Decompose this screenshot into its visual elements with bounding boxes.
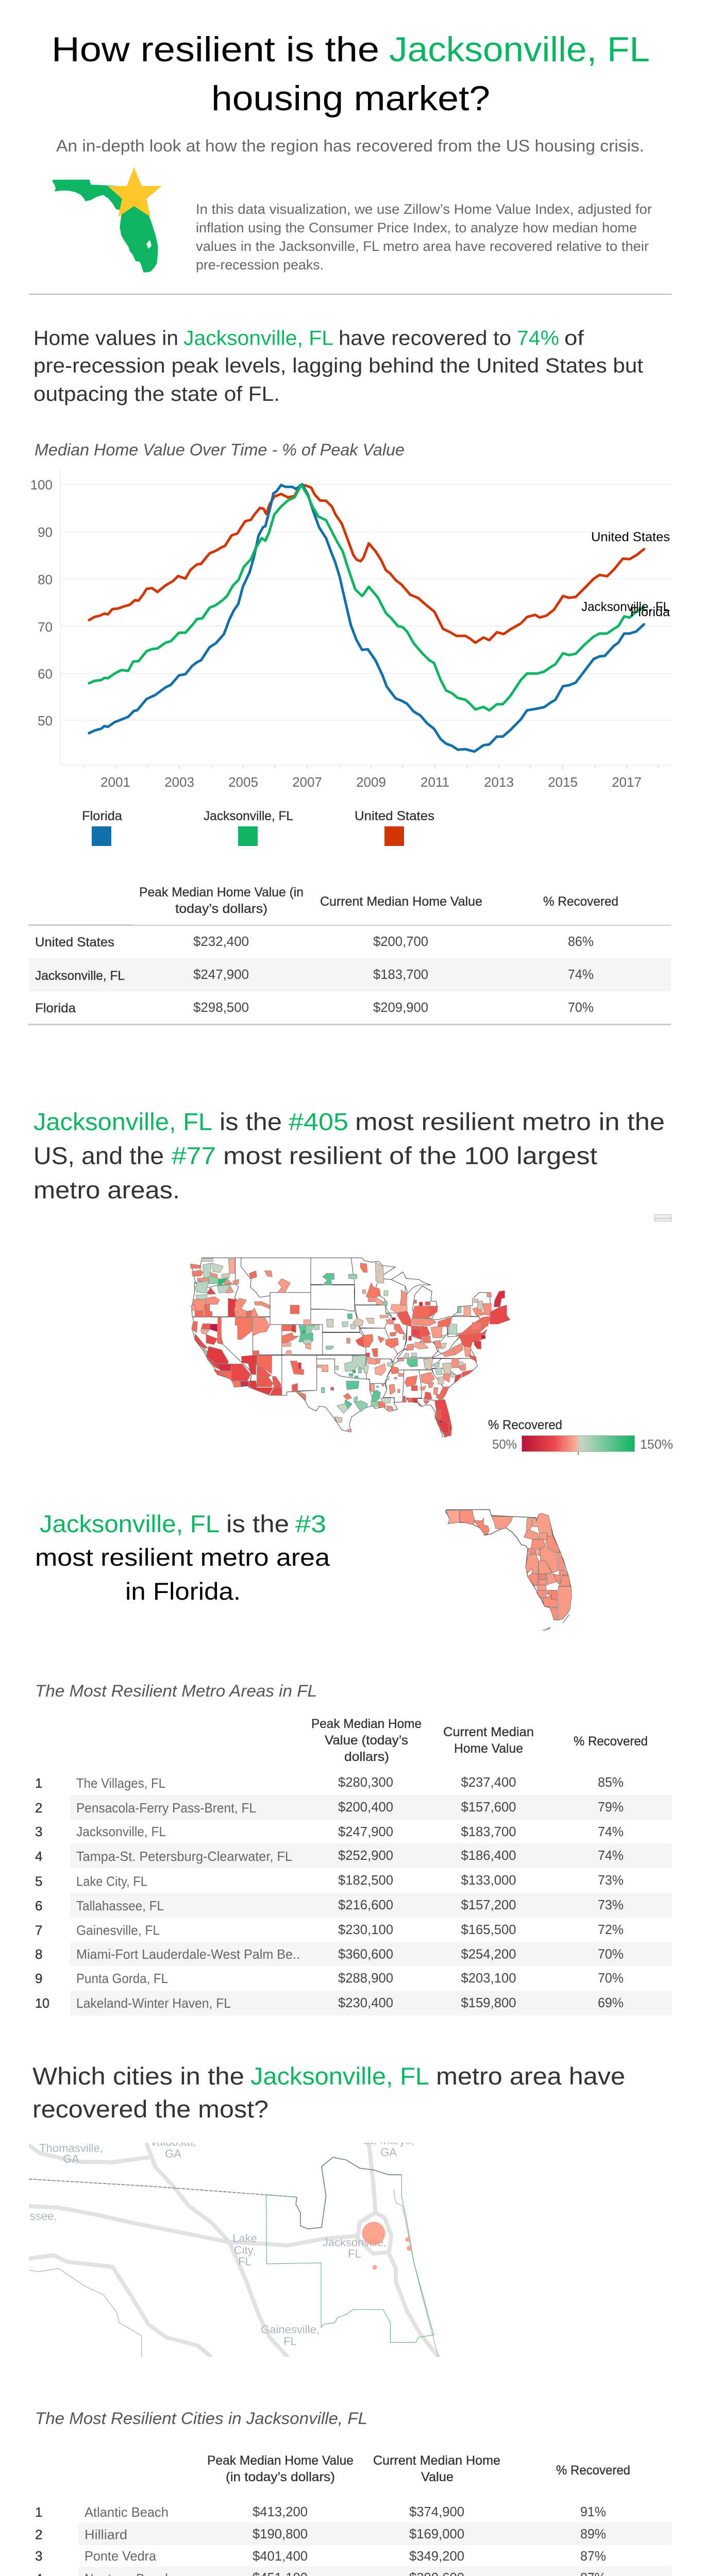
table header [311,1717,648,1764]
table rows: Jacksonville, FL [76,1824,166,1839]
row: United States: United States [35,935,114,950]
city name labels: Valdosta, [150,2136,196,2148]
table rows: 2 [35,2527,42,2542]
series end labels: United States [591,530,670,544]
heading: home value recovery: pre-recession peak levels, lagging behind the United States but [33,354,643,377]
table rows: $247,900 [338,1824,393,1839]
subtitle: An in-depth look at how the region has recovered from the US housing crisis. [56,137,644,155]
table rows: $169,000 [409,2526,464,2541]
city name labels: City, [234,2244,256,2257]
heading: cities in the metro: Which cities in the [32,2062,244,2090]
heading: cities in the metro [32,2062,625,2123]
table rows: $203,100 [461,1970,516,1986]
table header: Peak Median Home Value [207,2453,354,2468]
table rows [35,1774,624,2011]
city name labels: GA [165,2147,181,2160]
heading: cities in the metro: recovered the most? [32,2095,268,2123]
series end labels: Jacksonville, FL [581,600,670,614]
icon: Florida with star [53,167,162,273]
heading: Florida rank: is the [226,1510,289,1537]
heading: Florida rank [35,1510,330,1605]
table rows: 1 [35,2504,42,2520]
table rows: The Villages, FL [76,1775,165,1791]
row: Jacksonville [35,967,594,983]
heading: cities in the metro: Jacksonville, FL [250,2062,429,2090]
table rows: 74% [598,1848,624,1863]
title: How resilient is the [52,30,379,69]
table rows: 79% [598,1799,624,1815]
heading: Florida rank: #3 [295,1510,326,1537]
table rows: $252,900 [338,1848,393,1863]
series end labels [581,530,670,619]
heading: national rank: #77 [172,1142,216,1170]
table header: dollars) [344,1750,389,1764]
heading: national rank: metro areas. [33,1176,180,1204]
table header: (in today’s dollars) [226,2470,335,2484]
table rows: $360,600 [338,1946,393,1962]
y axis labels: 90 [38,524,53,540]
row: United States [35,934,594,950]
table header: % Recovered [556,2463,630,2478]
y axis labels: 50 [38,713,53,728]
map: cities in the Jacksonville metro [29,2134,439,2357]
city name labels: FL [238,2255,251,2268]
roads and boundaries [29,2143,439,2357]
heading: national rank: Jacksonville, FL [33,1108,212,1136]
intro paragraph: In this data visualization, we use Zillow’s Home Value Index, adjusted for [196,201,652,217]
chart legend: Jacksonville, FL [204,809,293,823]
city name labels: Lake [232,2232,257,2245]
heading: home value recovery: have recovered to [339,327,511,349]
row: Jacksonville: $247,900 [193,967,249,982]
title: housing market? [211,79,490,118]
table rows: 3 [35,1824,42,1839]
table rows: $413,200 [253,2504,308,2519]
heading: home value recovery: outpacing the state of FL. [33,383,280,405]
west metro patches [190,1259,342,1422]
heading: national rank: US, and the [33,1142,164,1170]
table rows: $374,900 [409,2504,464,2519]
table rows: Ponte Vedra [85,2548,157,2564]
row: Jacksonville: Jacksonville, FL [35,969,125,983]
table rows: Atlantic Beach [85,2504,169,2520]
table rows: 4 [35,1849,42,1864]
heading: Florida rank: Jacksonville, FL [40,1510,220,1537]
x axis labels: 2003 [164,774,194,790]
chart legend: United States [355,809,434,823]
intro paragraph: inflation using the Consumer Price Index, to analyze how median home [196,220,637,235]
row: United States: 86% [568,934,594,949]
table rows: $157,200 [461,1897,516,1912]
table header [207,2453,630,2484]
map: Florida metro areas [446,1510,572,1631]
x axis labels: 2005 [228,774,258,790]
y axis labels: 60 [38,666,53,682]
table rows: 72% [598,1922,624,1937]
city name labels: Thomasville, [39,2142,103,2155]
table rows: 74% [598,1824,624,1839]
map legend: percent recovered: 150% [640,1437,673,1452]
heading: home value recovery [33,327,643,405]
city name labels: Gainesville, [261,2323,320,2336]
row: Florida [35,999,594,1015]
map legend: percent recovered [488,1418,673,1455]
city name labels: ssee, [30,2210,57,2223]
table rows: $230,100 [338,1922,393,1937]
heading: national rank: most resilient of the 100 largest [223,1142,597,1170]
chart legend [82,809,434,846]
table rows: $182,500 [338,1872,393,1888]
row: Florida: Florida [35,1001,76,1015]
row: United States: $232,400 [193,934,249,949]
table rows: 70% [598,1946,624,1962]
intro paragraph: pre-recession peaks. [196,257,324,273]
x axis labels: 2001 [100,774,130,790]
map legend: percent recovered: 50% [492,1437,517,1452]
table rows: 1 [35,1775,42,1791]
x axis labels: 2009 [356,774,386,790]
row: United States: $200,700 [373,934,428,949]
row: Florida: $209,900 [373,999,428,1015]
x axis labels: 2015 [548,774,578,790]
city name labels: St. Marys, [363,2134,414,2147]
table rows: 73% [598,1872,624,1888]
table rows: $349,200 [409,2548,464,2564]
x axis labels: 2013 [484,774,514,790]
table rows: Tallahassee, FL [76,1898,164,1913]
icon: map toolbar button [654,1215,671,1221]
series end labels: Florida [630,605,670,619]
table rows: 9 [35,1971,42,1986]
line chart: median home value over time [30,470,673,790]
table rows: 89% [580,2526,606,2541]
table rows: 5 [35,1873,42,1889]
table: most resilient metro areas in FL [35,1717,672,2015]
table rows: $288,900 [338,1970,393,1986]
table rows: $159,800 [461,1995,516,2010]
map: metro areas by percent recovered [190,1258,510,1437]
y axis labels [30,477,53,728]
intro paragraph: values in the Jacksonville, FL metro area have recovered relative to their [196,239,649,254]
heading: home value recovery: of [564,327,584,349]
intro paragraph [196,201,652,273]
table rows: Lakeland-Winter Haven, FL [76,1995,231,2011]
table header: % Recovered [574,1734,648,1749]
y axis labels: 100 [30,477,53,493]
table rows: $183,700 [461,1824,516,1839]
title [52,30,650,118]
table header: Current Median Home Value [320,894,482,909]
series lines [89,484,644,752]
table rows: $157,600 [461,1799,516,1815]
heading: home value recovery: Home values in [33,327,178,349]
table: most resilient cities in Jacksonville [35,2453,672,2576]
table rows: Punta Gorda, FL [76,1971,168,1986]
table header [139,885,618,916]
city bubbles [362,2222,412,2270]
table header: today’s dollars) [175,902,267,916]
heading: home value recovery: Jacksonville, FL [183,327,333,349]
table rows: 91% [580,2504,606,2519]
table rows: 8 [35,1946,42,1962]
table rows [35,2504,606,2576]
table title: most resilient metros: The Most Resilient Metro Areas in FL [35,1682,317,1700]
table rows: Hilliard [85,2527,127,2542]
title: Jacksonville, FL [389,30,650,69]
chart title: Median Home Value Over Time - % of Peak Value [35,440,405,459]
table header: Value (today’s [325,1733,408,1748]
heading: Florida rank: most resilient metro area [35,1544,330,1571]
city name labels: FL [283,2335,297,2348]
table rows: 6 [35,1898,42,1913]
table rows: $200,400 [338,1799,393,1815]
row: Florida: $298,500 [193,999,249,1015]
table rows: $280,300 [338,1774,393,1790]
table rows: $230,400 [338,1995,393,2010]
y axis labels: 70 [38,619,53,635]
table rows: 87% [580,2548,606,2564]
table rows: $254,200 [461,1946,516,1962]
table rows: Miami-Fort Lauderdale-West Palm Be.. [76,1946,300,1962]
east metro patches [335,1262,510,1436]
table header: % Recovered [543,894,618,909]
table rows: $401,400 [253,2548,308,2564]
table header: Peak Median Home [311,1717,422,1731]
y axis labels: 80 [38,572,53,587]
table rows: 3 [35,2548,42,2564]
table rows: 70% [598,1970,624,1986]
table: US, metro and state comparison [28,885,671,1025]
city name labels: FL [348,2247,361,2260]
heading: national rank: #405 [289,1108,348,1136]
x axis labels [100,774,642,790]
table rows: Gainesville, FL [76,1923,160,1938]
heading: national rank: is the [220,1108,282,1136]
table rows: $216,600 [338,1897,393,1912]
heading: cities in the metro: metro area have [436,2062,625,2090]
map legend: percent recovered: % Recovered [488,1418,562,1432]
city name labels: GA [63,2153,79,2165]
table rows: 85% [598,1774,624,1790]
table rows: $237,400 [461,1774,516,1790]
row: Jacksonville: $183,700 [373,967,428,982]
chart legend: Florida [82,809,122,823]
table rows: 10 [35,1995,49,2011]
table rows: Tampa-St. Petersburg-Clearwater, FL [76,1849,292,1864]
city name labels: Jacksonville, [323,2236,387,2249]
table header: Value [421,2470,454,2484]
city name labels: GA [380,2146,397,2159]
table header: Peak Median Home Value (in [139,885,304,900]
table rows: 7 [35,1923,42,1938]
x axis labels: 2007 [292,774,322,790]
x axis labels: 2017 [612,774,642,790]
table rows: $133,000 [461,1872,516,1888]
table header: Home Value [454,1741,523,1756]
heading: national rank: most resilient metro in the [355,1108,665,1136]
table header: Current Median Home [373,2453,500,2468]
table rows: 69% [598,1995,624,2010]
table rows: $190,800 [253,2526,308,2541]
table rows: 2 [35,1800,42,1816]
table rows: $186,400 [461,1848,516,1863]
table header: Current Median [443,1725,534,1739]
heading: Florida rank: in Florida. [125,1578,241,1605]
x axis labels: 2011 [421,774,449,790]
base state outlines [191,1258,491,1437]
row: Jacksonville: 74% [568,967,594,982]
table rows: Pensacola-Ferry Pass-Brent, FL [76,1800,256,1816]
table rows: $165,500 [461,1922,516,1937]
table title: most resilient cities: The Most Resilient Cities in Jacksonville, FL [35,2409,367,2428]
city name labels [30,2134,414,2348]
table rows: 73% [598,1897,624,1912]
table rows: Lake City, FL [76,1873,147,1889]
heading: national rank [33,1108,665,1204]
heading: home value recovery: 74% [517,327,559,349]
row: Florida: 70% [568,999,594,1015]
